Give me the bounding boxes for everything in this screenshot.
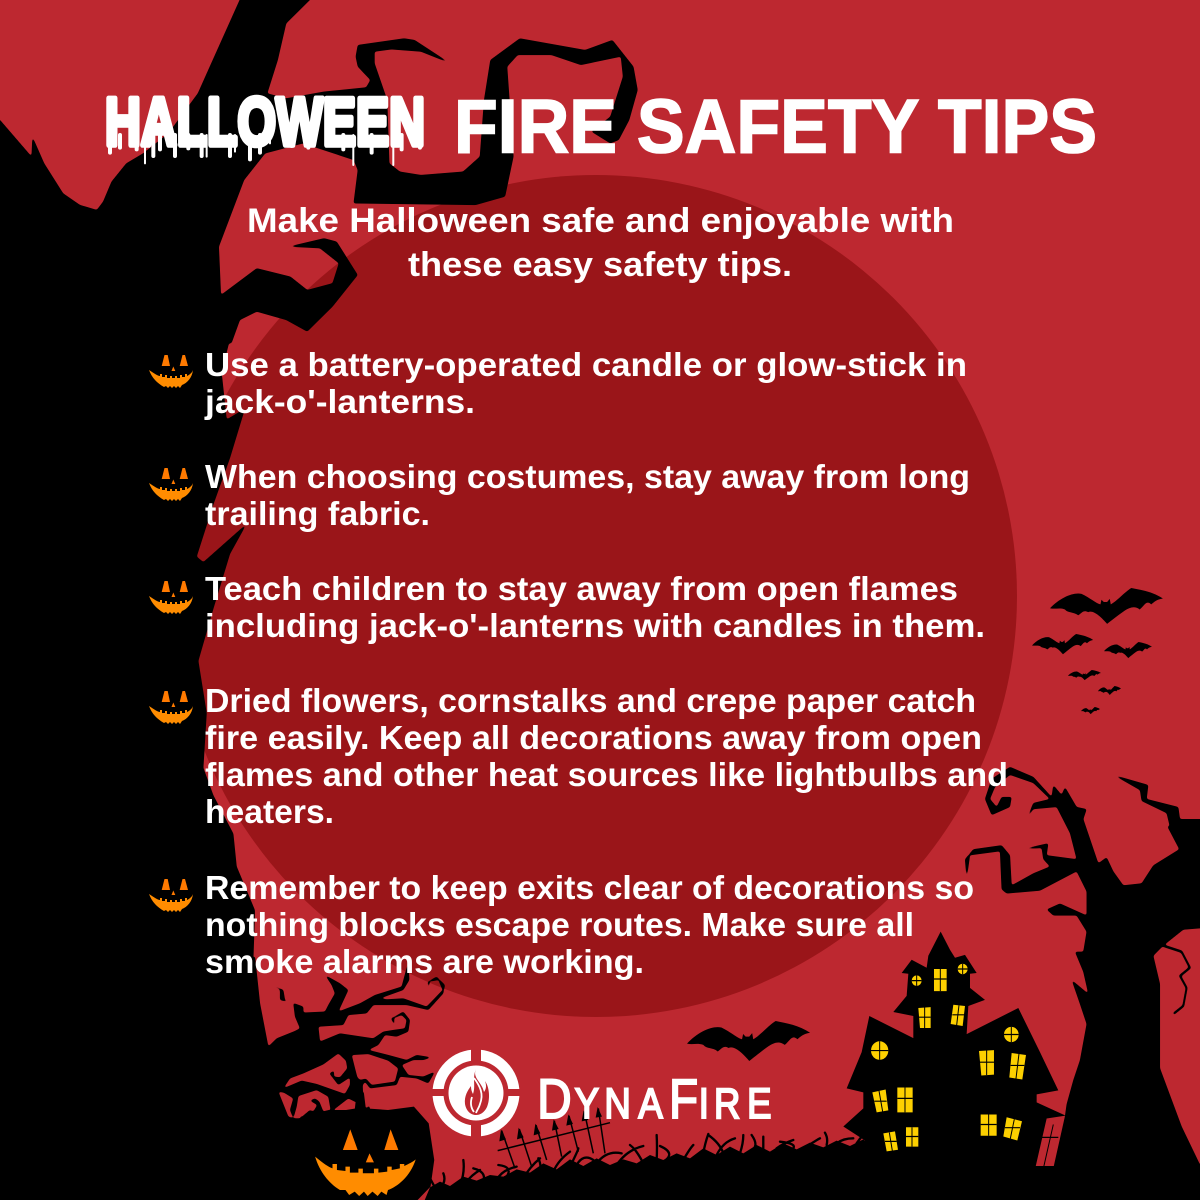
title: Halloween in dripping lettering — [105, 84, 425, 165]
title: Fire Safety Tips: FIRE SAFETY TIPS — [454, 84, 1097, 170]
title: Halloween in dripping lettering: HALLOWEEN — [105, 84, 425, 160]
tip 4: Dried flowers, cornstalks and crepe paper catch — [205, 682, 976, 719]
tip 1: Use a battery-operated candle or glow-stick in — [205, 346, 967, 383]
logo wordmark: D — [537, 1068, 572, 1131]
subtitle: these easy safety tips. — [408, 246, 792, 284]
tip 2: When choosing costumes, stay away from long — [205, 458, 970, 495]
tip 5: Remember to keep exits clear of decorations so — [205, 869, 974, 906]
tip 5: smoke alarms are working. — [205, 943, 644, 980]
bats flock right — [1032, 588, 1163, 714]
dark red moon circle — [175, 175, 1017, 1017]
logo wordmark: IRE — [699, 1080, 772, 1128]
tip 4: fire easily. Keep all decorations away from open — [205, 719, 982, 756]
tip 1 — [149, 346, 967, 420]
tip 5: nothing blocks escape routes. Make sure all — [205, 906, 914, 943]
house windows — [871, 964, 1026, 1151]
tip 5 — [149, 869, 974, 980]
tip 4 — [149, 682, 1008, 830]
haunted house — [843, 932, 1066, 1177]
small tree with branches — [0, 957, 445, 1200]
logo wordmark: YNA — [575, 1080, 663, 1128]
ground under house — [860, 1166, 1200, 1200]
iron fence — [498, 1107, 610, 1168]
subtitle — [247, 202, 954, 284]
large tree silhouette on the left — [0, 0, 638, 960]
tip 3: including jack-o'-lanterns with candles in them. — [205, 607, 985, 644]
tip 3 — [149, 570, 985, 644]
logo wordmark: F — [669, 1068, 698, 1131]
tip 1: jack-o'-lanterns. — [204, 383, 475, 420]
pumpkin — [288, 1082, 434, 1200]
tip 2: trailing fabric. — [205, 495, 430, 532]
fence post behind house — [1040, 1124, 1058, 1169]
tip 4: flames and other heat sources like lightbulbs and — [205, 756, 1008, 793]
tip 3: Teach children to stay away from open flames — [205, 570, 958, 607]
subtitle: Make Halloween safe and enjoyable with — [247, 202, 954, 240]
bat near logo — [687, 1021, 810, 1061]
right tree — [965, 767, 1200, 1200]
DynaFire logo — [428, 1045, 772, 1141]
logo mark — [428, 1045, 524, 1141]
tip 4: heaters. — [205, 793, 334, 830]
bottom grass and ground — [423, 1133, 870, 1200]
tip 2 — [149, 458, 970, 532]
